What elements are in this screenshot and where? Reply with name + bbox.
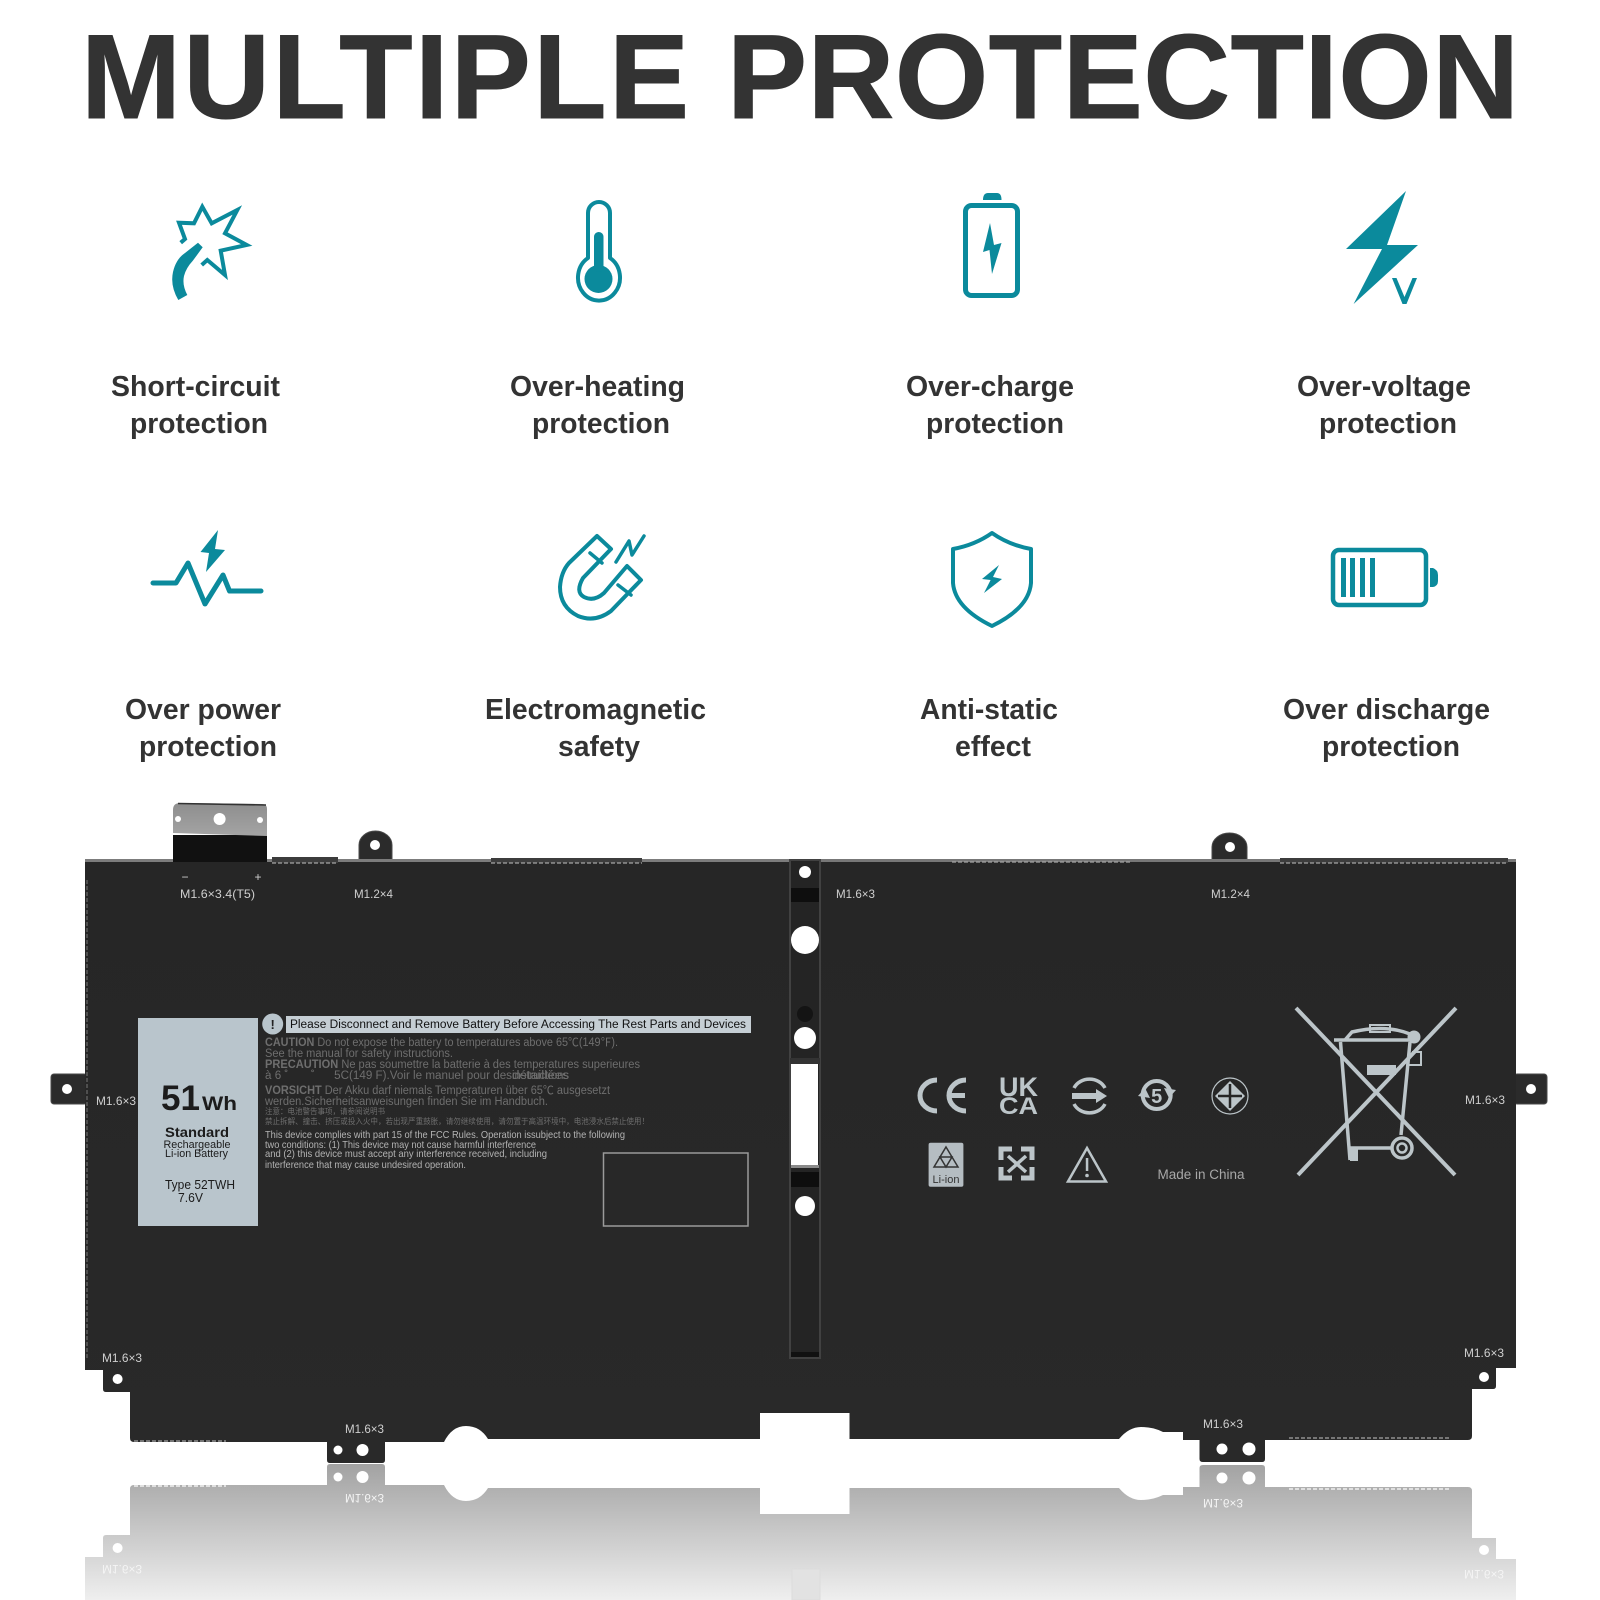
- label: over-charge protection: protection: [926, 408, 1064, 440]
- barcode box: [604, 1153, 748, 1226]
- caution text: instructions: [512, 1070, 569, 1082]
- center strip: [790, 860, 820, 1358]
- title: MULTIPLE: [81, 10, 689, 144]
- icon: Li-ion recycling: Li-ion: [933, 1174, 959, 1186]
- spec label: [138, 1018, 258, 1226]
- icon: UKCA mark: [999, 1072, 1038, 1120]
- icon: diamond circle mark: [1212, 1078, 1248, 1114]
- battery reflection: M1.6×3: [102, 1562, 142, 1576]
- connector tab: [173, 803, 267, 861]
- caution text: PRECAUTION Ne pas soumettre la batterie à des temperatures superieures: [265, 1059, 640, 1071]
- screw labels: +: [254, 870, 262, 884]
- icon: magnet: [560, 536, 644, 619]
- icon: Li-ion recycling: [929, 1143, 963, 1187]
- label: over power protection: Over power: [125, 694, 281, 726]
- caution text: à 6 ˚ ˚ 5C(149 F).Voir le manuel pour des: [265, 1070, 512, 1082]
- warning banner: Please Disconnect and Remove Battery Before Accessing The Rest Parts and Devices: [290, 1019, 746, 1031]
- label: over-heating protection: Over-heating: [510, 371, 685, 403]
- caution text: VORSICHT Der Akku darf niemals Temperaturen über 65℃ ausgesetzt: [265, 1085, 611, 1097]
- FCC text: two conditions: (1) This device may not cause harmful interference: [265, 1139, 536, 1151]
- spec label: 7.6V: [178, 1190, 203, 1205]
- warning banner: [262, 1014, 751, 1034]
- label: over-heating protection: protection: [532, 408, 670, 440]
- label: anti-static effect: Anti-static: [920, 694, 1058, 726]
- icon: power pulse: [153, 530, 261, 604]
- icon: 5 year recycling: [1138, 1081, 1176, 1109]
- icon: thermometer: [578, 202, 620, 301]
- spec label: Type 52TWH: [165, 1177, 235, 1192]
- label: over-voltage protection: [1297, 371, 1471, 440]
- battery reflection: M1.6×3: [345, 1491, 384, 1505]
- icon: low battery: [1333, 550, 1438, 605]
- label: over power protection: protection: [139, 731, 277, 763]
- spec label: 51: [161, 1079, 200, 1118]
- icon: compliance arrow: [1072, 1079, 1107, 1113]
- caution text: 注意：电池警告事项，请参阅说明书: [265, 1106, 385, 1116]
- icon: anti-static shield: [953, 533, 1031, 626]
- title: PROTECTION: [727, 10, 1519, 144]
- spec label: Rechargeable: [164, 1139, 230, 1151]
- battery reflection: [85, 1464, 1516, 1600]
- label: short-circuit protection: Short-circuit: [111, 371, 280, 403]
- icon: voltage bolt: [1346, 191, 1418, 304]
- label: over-voltage protection: protection: [1319, 408, 1457, 440]
- battery body: [85, 860, 1516, 1463]
- label: over-voltage protection: Over-voltage: [1297, 371, 1471, 403]
- label: over-charge protection: Over-charge: [906, 371, 1074, 403]
- battery reflection: M1.6×3: [1464, 1567, 1504, 1581]
- title: [81, 10, 1519, 144]
- icon: short-circuit spark: [172, 207, 247, 300]
- screw labels: M1.6×3: [1203, 1417, 1243, 1431]
- label: over discharge protection: Over discharge: [1283, 694, 1490, 726]
- label: electromagnetic safety: safety: [558, 731, 640, 763]
- caution text: détaillées: [512, 1070, 569, 1082]
- screw labels: M1.2×4: [1211, 887, 1250, 901]
- screw labels: M1.6×3: [345, 1422, 384, 1436]
- icon: UKCA mark: CA: [999, 1093, 1038, 1120]
- label: short-circuit protection: protection: [130, 408, 268, 440]
- label: short-circuit protection: [111, 371, 280, 440]
- made in china: Made in China: [1158, 1167, 1245, 1182]
- mounting tabs: [51, 831, 1547, 1104]
- FCC text: This device complies with part 15 of the FCC Rules. Operation issubject to the following: [265, 1129, 625, 1141]
- icon: recycling square: [1001, 1149, 1032, 1178]
- label: over power protection: [125, 694, 281, 763]
- screw labels: [96, 870, 1505, 1436]
- label: anti-static effect: [920, 694, 1058, 763]
- spec label: Standard: [165, 1124, 229, 1140]
- FCC text: interference that may cause undesired operation.: [265, 1159, 466, 1171]
- battery reflection: M1.6×3: [1203, 1496, 1243, 1510]
- icon: charging battery: [966, 193, 1018, 296]
- icon: CE mark: [920, 1080, 966, 1111]
- screw labels: M1.6×3: [1465, 1093, 1505, 1107]
- screw labels: M1.6×3: [96, 1094, 136, 1108]
- top edge highlight: [85, 857, 1516, 1441]
- label: over discharge protection: [1283, 694, 1490, 763]
- caution text: 禁止拆解、撞击、挤压或投入火中，若出现严重鼓胀，请勿继续使用，请勿置于高温环境中，电池浸水后禁止使用！: [265, 1116, 649, 1126]
- screw labels: −: [181, 870, 189, 884]
- label: electromagnetic safety: [485, 694, 706, 763]
- caution text: werden.Sicherheitsanweisungen finden Sie im Handbuch.: [264, 1096, 548, 1108]
- label: over discharge protection: protection: [1322, 731, 1460, 763]
- panel: protection features: [111, 191, 1490, 763]
- holes in tabs: [62, 840, 1536, 1456]
- label: electromagnetic safety: Electromagnetic: [485, 694, 706, 726]
- icon: warning triangle: [1068, 1148, 1106, 1182]
- icon: UKCA mark: UK: [999, 1072, 1038, 1102]
- spec label: Li-ion Battery: [165, 1148, 228, 1160]
- warning banner: !: [271, 1017, 275, 1032]
- screw labels: M1.6×3.4(T5): [180, 887, 255, 901]
- icon: WEEE crossed-out bin: [1296, 1008, 1456, 1175]
- caution text: CAUTION Do not expose the battery to temperatures above 65℃(149℉).: [265, 1037, 618, 1049]
- screw labels: M1.6×3: [1464, 1346, 1504, 1360]
- screw labels: M1.6×3: [836, 887, 875, 901]
- label: anti-static effect: effect: [955, 731, 1032, 763]
- label: over-charge protection: [906, 371, 1074, 440]
- caution text: [264, 1037, 649, 1126]
- spec label: Wh: [202, 1094, 237, 1115]
- screw labels: M1.6×3: [102, 1351, 142, 1365]
- FCC text: and (2) this device must accept any interference received, including: [265, 1148, 547, 1160]
- icon: 5 year recycling: 5: [1151, 1086, 1162, 1108]
- FCC text: [265, 1129, 625, 1171]
- screw labels: M1.2×4: [354, 887, 393, 901]
- label: over-heating protection: [510, 371, 685, 440]
- caution text: See the manual for safety instructions.: [265, 1048, 453, 1060]
- battery: [51, 803, 1547, 1463]
